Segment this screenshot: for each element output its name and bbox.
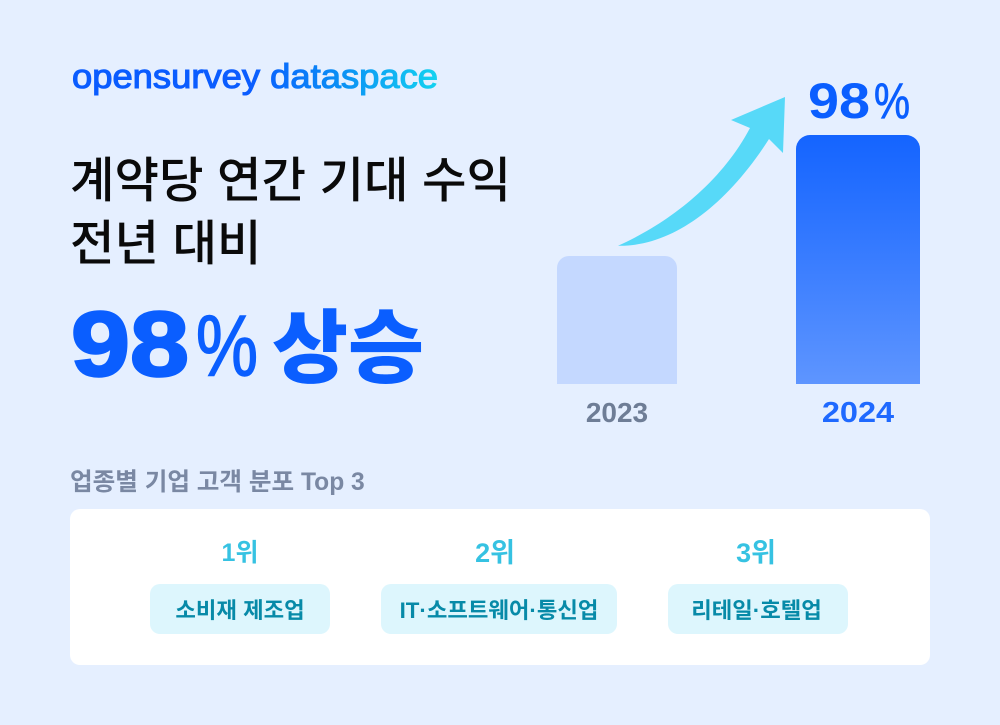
value: 98%: % xyxy=(874,73,910,129)
value: 98%: 98 xyxy=(808,73,870,129)
pill: rank 3 industry xyxy=(668,584,848,634)
label: 2024: 2024 xyxy=(822,397,894,429)
big stat: 98% 상승 xyxy=(71,294,424,396)
rank 3: 3위 xyxy=(736,538,776,568)
pill: rank 1 industry xyxy=(150,584,330,634)
headline: 계약당 연간 기대 수익 전년 대비: 계약당 연간 기대 수익 xyxy=(70,154,511,208)
headline: 계약당 연간 기대 수익 전년 대비: 전년 대비 xyxy=(70,217,262,271)
logo: opensurvey dataspace: opensurvey dataspace xyxy=(72,58,438,96)
pill: rank 1 industry: 소비재 제조업 xyxy=(175,598,305,623)
pill: rank 3 industry: 리테일·호텔업 xyxy=(691,598,822,623)
rank 1: 1위 xyxy=(222,539,258,567)
pill: rank 2 industry xyxy=(381,584,617,634)
bar: 2024 xyxy=(796,135,920,384)
headline: 계약당 연간 기대 수익 전년 대비 xyxy=(70,154,511,271)
big stat: 98% 상승: 상승 xyxy=(272,304,424,393)
big stat: 98% 상승: % xyxy=(196,298,258,394)
big stat: 98% 상승: 98 xyxy=(71,294,189,396)
label: 2023: 2023 xyxy=(586,397,648,428)
section heading: 업종별 기업 고객 분포 Top 3 xyxy=(70,469,365,496)
rank 2: 2위 xyxy=(475,538,515,568)
bar: 2023 xyxy=(557,256,677,384)
value: 98% xyxy=(808,73,910,129)
panel: top 3 industries xyxy=(70,509,930,665)
bar chart: 2023 vs 2024 xyxy=(557,73,920,429)
arrow: rising trend xyxy=(618,97,785,246)
pill: rank 2 industry: IT·소프트웨어·통신업 xyxy=(400,598,598,623)
